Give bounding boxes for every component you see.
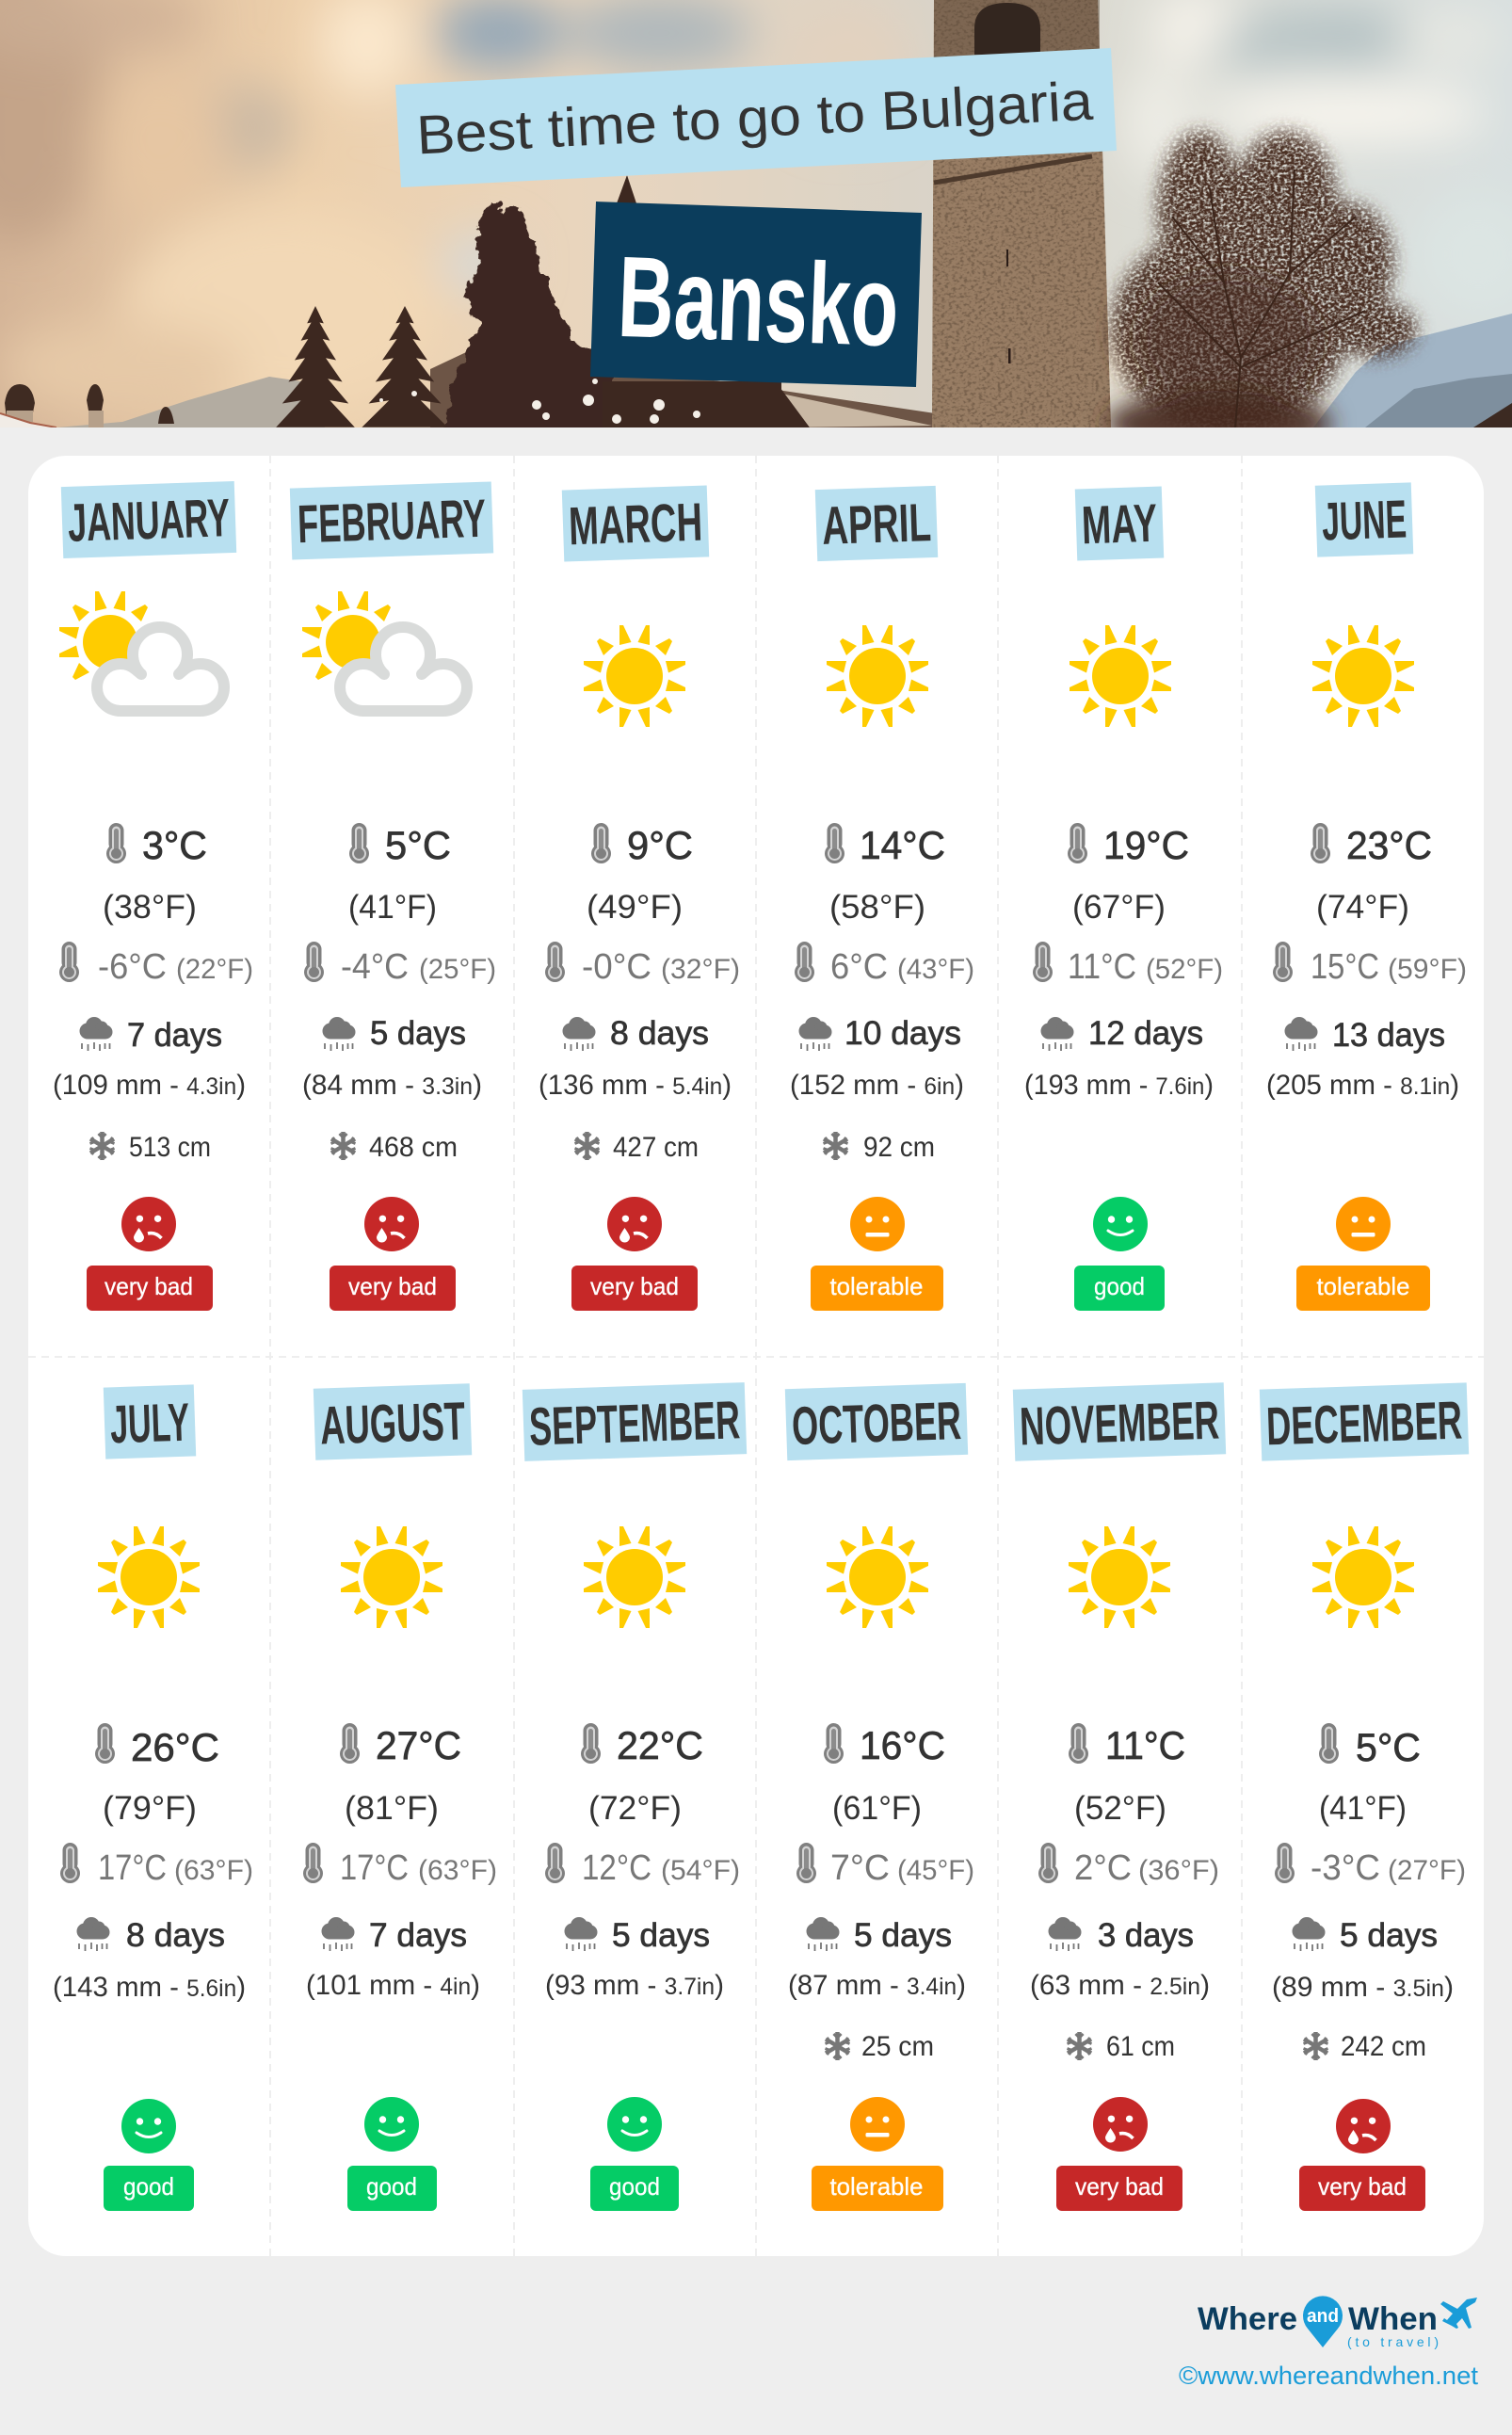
rating badge: good — [366, 2172, 417, 2201]
title banner: Best time to go to Bulgaria — [415, 71, 1095, 166]
rating face — [607, 1197, 662, 1251]
high temperature fahrenheit: (58°F) — [829, 889, 925, 926]
rating badge — [1296, 1266, 1430, 1311]
rating face — [1336, 2099, 1391, 2153]
destination name box — [590, 202, 922, 387]
rating badge: very bad — [590, 1272, 679, 1300]
snow depth: 61 cm — [1106, 2031, 1175, 2062]
rating badge: very bad — [1318, 2172, 1407, 2201]
low temperature — [796, 1843, 974, 1888]
rating face — [1093, 1197, 1148, 1251]
high temperature — [1311, 823, 1432, 867]
high temperature fahrenheit: (61°F) — [832, 1790, 922, 1827]
rainy days — [1292, 1917, 1438, 1954]
low temperature: (63°F) — [174, 1855, 253, 1886]
low temperature: (59°F) — [1388, 954, 1467, 985]
low temperature: (63°F) — [418, 1855, 497, 1886]
high temperature — [581, 1723, 703, 1767]
rainy days: 7 days — [369, 1917, 467, 1954]
low temperature: (36°F) — [1138, 1855, 1219, 1886]
precipitation: (84 mm - 3.3in) — [302, 1070, 482, 1101]
high temperature — [1069, 1723, 1185, 1767]
panel: monthly climate grid — [28, 456, 1484, 2256]
rating badge — [347, 2166, 437, 2211]
low temperature — [303, 1843, 497, 1888]
low temperature: 17°C — [340, 1848, 409, 1888]
month label — [562, 485, 709, 562]
title banner — [395, 48, 1117, 187]
rainy days: 5 days — [1340, 1917, 1438, 1954]
month label: FEBRUARY — [297, 489, 487, 555]
rating badge — [590, 2166, 679, 2211]
high temperature: 3°C — [142, 823, 207, 867]
low temperature: 12°C — [582, 1848, 651, 1888]
snow depth: 513 cm — [129, 1132, 211, 1163]
month label: OCTOBER — [791, 1391, 962, 1457]
icon: sun — [341, 1526, 442, 1628]
low temperature: (27°F) — [1388, 1855, 1466, 1886]
rating face — [364, 2097, 419, 2152]
low temperature: 15°C — [1311, 947, 1379, 987]
high temperature — [95, 1723, 219, 1769]
precipitation: (205 mm - 8.1in) — [1266, 1070, 1459, 1101]
rainy days — [322, 1015, 466, 1052]
column: April — [790, 486, 974, 1311]
high temperature fahrenheit: (41°F) — [1319, 1790, 1407, 1827]
month label: MAY — [1081, 493, 1158, 556]
icon: airplane — [1440, 2298, 1477, 2329]
low temperature: 17°C — [98, 1848, 167, 1888]
rating badge: tolerable — [1316, 1272, 1410, 1300]
low temperature: -3°C — [1311, 1848, 1380, 1888]
rainy days: 5 days — [854, 1917, 952, 1954]
snow depth — [331, 1132, 458, 1163]
logo: Where and When (to travel): (to travel) — [1347, 2334, 1439, 2349]
icon: map pin — [1303, 2296, 1343, 2347]
icon: partly cloudy — [302, 591, 467, 711]
rating badge — [812, 2166, 943, 2211]
rating face — [850, 1197, 905, 1251]
month label: AUGUST — [319, 1391, 466, 1457]
precipitation: (152 mm - 6in) — [790, 1070, 964, 1101]
month label — [104, 1384, 196, 1459]
low temperature: (22°F) — [176, 954, 253, 985]
low temperature: -6°C — [98, 947, 167, 987]
column: February — [290, 481, 496, 1311]
month label: NOVEMBER — [1019, 1391, 1220, 1457]
rainy days — [563, 1015, 709, 1052]
precipitation: (143 mm - 5.6in) — [53, 1972, 246, 2003]
logo: Where and When (to travel): When — [1348, 2301, 1438, 2337]
rating badge — [811, 1266, 943, 1311]
rainy days — [322, 1917, 467, 1954]
high temperature: 22°C — [617, 1723, 703, 1767]
precipitation: (63 mm - 2.5in) — [1030, 1970, 1210, 2001]
icon: sun — [1312, 1526, 1414, 1628]
month label: SEPTEMBER — [528, 1390, 741, 1458]
snow depth — [823, 1132, 935, 1163]
rating badge — [1056, 2166, 1182, 2211]
high temperature: 16°C — [860, 1723, 945, 1767]
low temperature: -4°C — [341, 947, 409, 987]
high temperature fahrenheit: (81°F) — [345, 1790, 439, 1827]
rating badge: very bad — [105, 1272, 193, 1300]
precipitation: (87 mm - 3.4in) — [788, 1970, 966, 2001]
rating badge: good — [1094, 1272, 1145, 1300]
low temperature — [1275, 1843, 1466, 1888]
high temperature — [106, 823, 207, 867]
column: December — [1260, 1382, 1469, 2211]
snow depth — [1068, 2031, 1175, 2062]
month label — [1013, 1382, 1226, 1461]
column: June — [1266, 482, 1467, 1311]
month label — [290, 481, 493, 560]
low temperature — [545, 1843, 740, 1888]
low temperature — [1273, 942, 1467, 987]
low temperature: (32°F) — [661, 954, 740, 985]
snow depth: 25 cm — [861, 2031, 934, 2062]
low temperature: 6°C — [830, 947, 888, 987]
low temperature — [545, 942, 740, 987]
high temperature — [1068, 823, 1189, 867]
month label — [815, 486, 938, 561]
rainy days: 7 days — [127, 1017, 222, 1054]
rainy days — [806, 1917, 952, 1954]
icon: sun — [1069, 1526, 1170, 1628]
rating face — [1336, 1197, 1391, 1251]
rating badge: tolerable — [830, 2172, 923, 2201]
precipitation: (101 mm - 4in) — [306, 1970, 480, 2001]
high temperature fahrenheit: (52°F) — [1074, 1790, 1166, 1827]
column: March — [539, 485, 740, 1311]
rainy days — [77, 1917, 225, 1954]
rating badge — [1299, 2166, 1425, 2211]
rainy days: 10 days — [844, 1015, 961, 1052]
low temperature: (54°F) — [661, 1855, 740, 1886]
month label: JANUARY — [67, 488, 231, 554]
rating badge — [87, 1266, 213, 1311]
rating face — [850, 2097, 905, 2152]
snow depth — [574, 1132, 699, 1163]
snow depth: 242 cm — [1341, 2031, 1426, 2062]
high temperature: 26°C — [131, 1725, 219, 1769]
high temperature: 5°C — [1356, 1725, 1421, 1769]
month label: APRIL — [821, 492, 932, 556]
low temperature — [59, 942, 253, 987]
high temperature fahrenheit: (74°F) — [1316, 889, 1409, 926]
icon: sun — [827, 1526, 928, 1628]
rating badge — [1074, 1266, 1165, 1311]
rating badge: good — [609, 2172, 660, 2201]
high temperature: 5°C — [385, 823, 451, 867]
icon: sun — [584, 1526, 685, 1628]
website credit: ©www.whereandwhen.net — [1179, 2362, 1478, 2390]
column: January — [53, 481, 253, 1311]
high temperature — [591, 823, 693, 867]
column: September — [523, 1382, 747, 2211]
high temperature: 19°C — [1103, 823, 1189, 867]
icon: sun — [98, 1526, 200, 1628]
month label — [523, 1382, 747, 1461]
logo: Where and When (to travel) — [1198, 2296, 1477, 2349]
high temperature fahrenheit: (72°F) — [588, 1790, 682, 1827]
precipitation: (193 mm - 7.6in) — [1024, 1070, 1214, 1101]
column: August — [303, 1383, 497, 2211]
rainy days — [79, 1017, 222, 1054]
column: May — [1024, 486, 1223, 1311]
rainy days — [565, 1917, 710, 1954]
high temperature fahrenheit: (79°F) — [103, 1790, 197, 1827]
high temperature — [340, 1723, 461, 1767]
rating badge: very bad — [1075, 2172, 1164, 2201]
high temperature fahrenheit: (67°F) — [1072, 889, 1166, 926]
snow depth — [825, 2031, 934, 2062]
rainy days: 12 days — [1088, 1015, 1203, 1052]
high temperature: 9°C — [627, 823, 693, 867]
low temperature: (25°F) — [419, 954, 496, 985]
month label: JULY — [109, 1393, 190, 1455]
month label — [785, 1383, 968, 1460]
low temperature — [60, 1843, 253, 1888]
snow depth — [90, 1132, 211, 1163]
column: July — [53, 1384, 253, 2211]
rainy days: 13 days — [1332, 1017, 1445, 1054]
high temperature: 23°C — [1346, 823, 1432, 867]
high temperature fahrenheit: (41°F) — [348, 889, 437, 926]
precipitation: (136 mm - 5.4in) — [539, 1070, 732, 1101]
snow depth: 468 cm — [369, 1132, 458, 1163]
column: November — [1013, 1382, 1226, 2211]
rainy days: 8 days — [610, 1015, 709, 1052]
low temperature — [304, 942, 496, 987]
rating badge — [104, 2166, 194, 2211]
destination name box: Bansko — [616, 233, 901, 370]
rating face — [607, 2097, 662, 2152]
precipitation: (89 mm - 3.5in) — [1272, 1972, 1454, 2003]
high temperature fahrenheit: (49°F) — [587, 889, 683, 926]
rating face — [364, 1197, 419, 1251]
low temperature: (52°F) — [1146, 954, 1223, 985]
low temperature — [1038, 1843, 1219, 1888]
snow depth — [1303, 2031, 1426, 2062]
month label — [1075, 486, 1164, 561]
logo: Where and When (to travel): Where — [1198, 2301, 1297, 2337]
month label — [1315, 482, 1413, 557]
icon: partly cloudy — [59, 591, 224, 711]
snow depth: 92 cm — [863, 1132, 935, 1163]
high temperature: 27°C — [376, 1723, 461, 1767]
rating face — [1093, 2097, 1148, 2152]
month label — [314, 1383, 472, 1460]
rating face — [121, 1197, 176, 1251]
high temperature — [1319, 1723, 1421, 1769]
icon: sun — [1312, 625, 1414, 727]
rainy days: 5 days — [612, 1917, 710, 1954]
icon: sun — [827, 625, 928, 727]
low temperature: (45°F) — [897, 1855, 974, 1886]
header photo: church tower and trees — [0, 0, 1512, 457]
rating badge: very bad — [348, 1272, 437, 1300]
rainy days: 8 days — [126, 1917, 225, 1954]
high temperature — [349, 823, 451, 867]
icon: sun — [1070, 625, 1171, 727]
rainy days — [1049, 1917, 1194, 1954]
rainy days: 5 days — [370, 1015, 466, 1052]
rating badge: good — [123, 2172, 174, 2201]
month label: MARCH — [568, 492, 703, 556]
low temperature: 2°C — [1074, 1848, 1132, 1888]
month label: JUNE — [1321, 490, 1407, 552]
high temperature — [824, 1723, 945, 1767]
low temperature: -0°C — [582, 947, 651, 987]
column: October — [785, 1383, 974, 2211]
low temperature — [795, 942, 974, 987]
high temperature fahrenheit: (38°F) — [103, 889, 197, 926]
rating badge: tolerable — [830, 1272, 923, 1300]
rainy days — [1284, 1017, 1445, 1054]
low temperature: 7°C — [830, 1848, 890, 1888]
precipitation: (109 mm - 4.3in) — [53, 1070, 246, 1101]
high temperature: 11°C — [1105, 1723, 1185, 1767]
rainy days: 3 days — [1098, 1917, 1194, 1954]
low temperature — [1033, 942, 1223, 987]
rating face — [121, 2099, 176, 2153]
high temperature — [825, 823, 945, 867]
low temperature: (43°F) — [897, 954, 974, 985]
low temperature: 11°C — [1068, 947, 1136, 987]
high temperature: 14°C — [860, 823, 945, 867]
precipitation: (93 mm - 3.7in) — [545, 1970, 724, 2001]
snow depth: 427 cm — [613, 1132, 699, 1163]
logo: Where and When (to travel): and — [1307, 2306, 1339, 2327]
icon: sun — [584, 625, 685, 727]
month label — [61, 481, 236, 558]
rating badge — [330, 1266, 456, 1311]
rating badge — [571, 1266, 698, 1311]
